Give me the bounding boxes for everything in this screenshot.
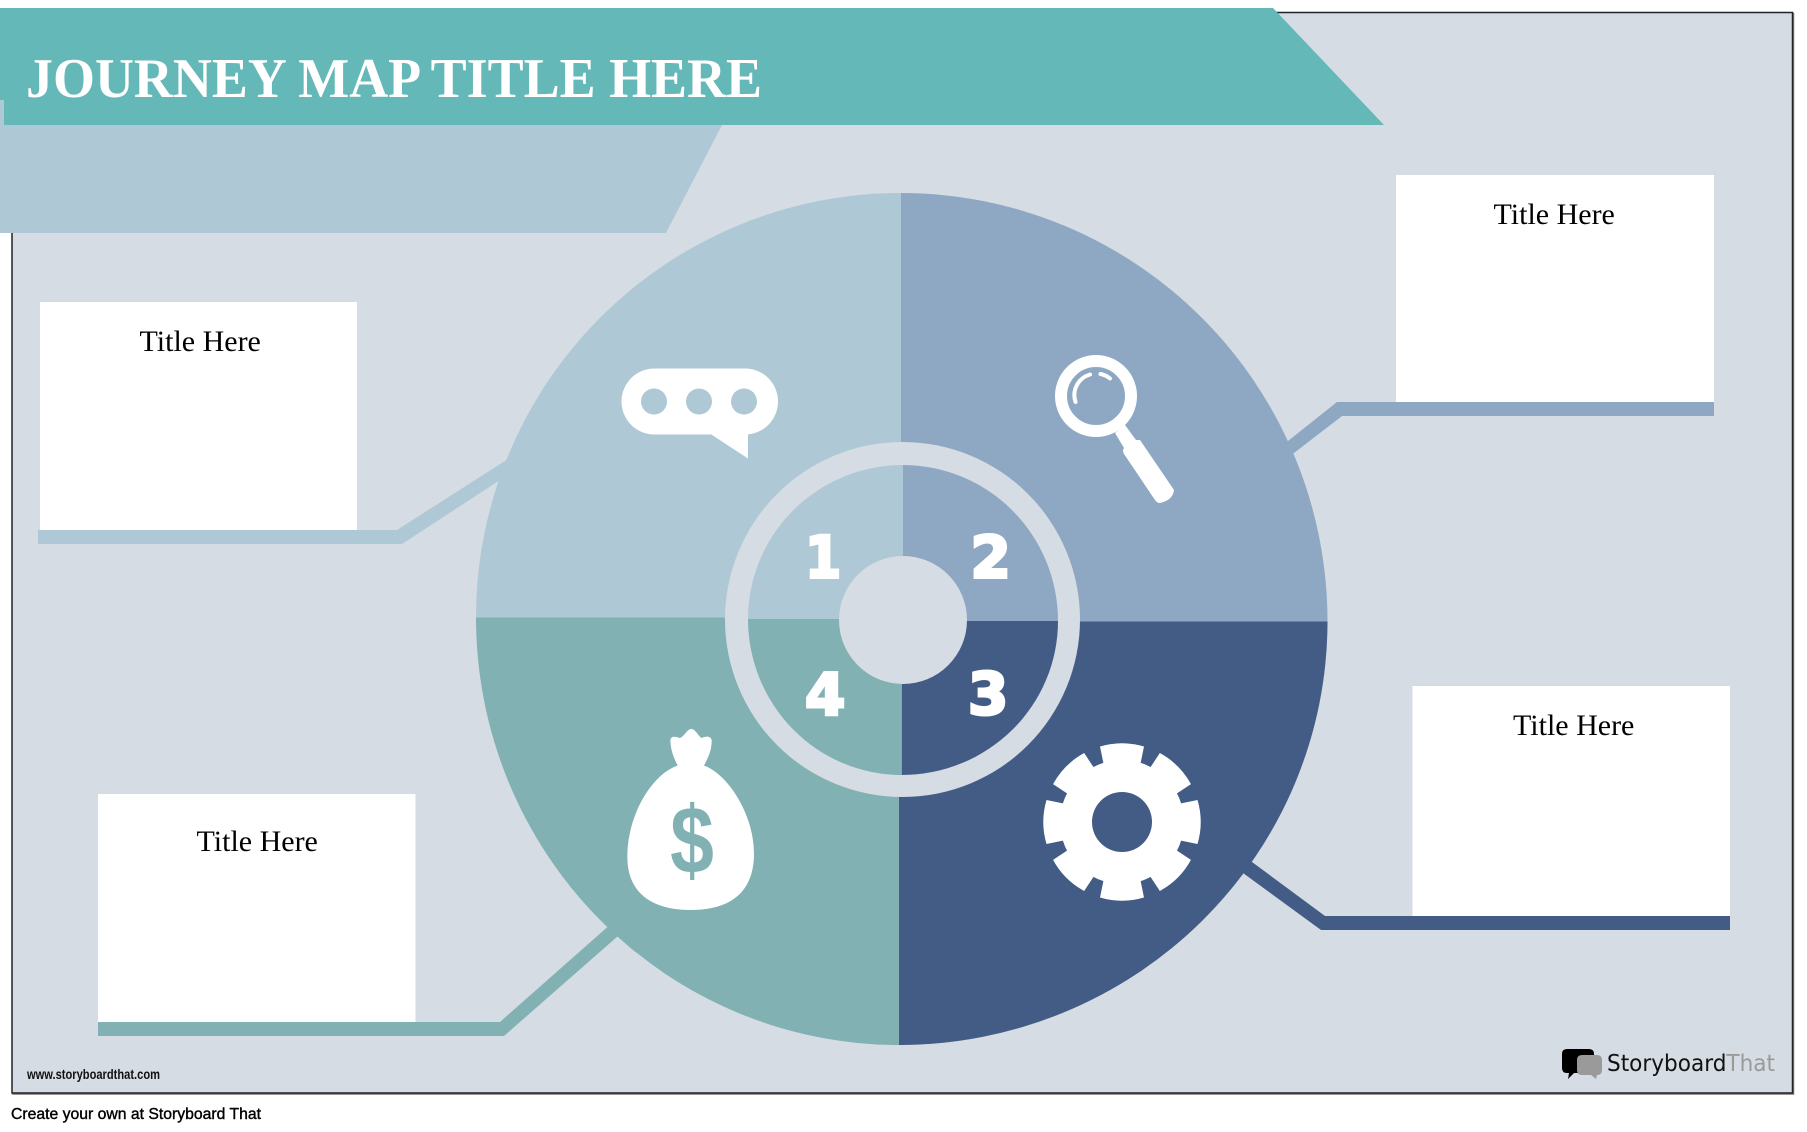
number 3: 3: [968, 660, 1008, 728]
heading: step 2: Title Here: [1494, 198, 1615, 231]
quadrant 1: [476, 193, 901, 618]
heading: step 3: Title Here: [1513, 709, 1634, 742]
heading: step 4: Title Here: [196, 825, 318, 858]
inner quadrant 2: [903, 465, 1058, 621]
icon: gear: [1043, 743, 1201, 901]
connector: step 2: [1280, 402, 1714, 460]
title banner: [0, 8, 1384, 125]
title: JOURNEY MAP TITLE HERE: [26, 48, 762, 110]
icon: money bag: $: [670, 787, 714, 894]
number 4: 4: [805, 660, 845, 728]
heading: step 1: Title Here: [140, 325, 261, 358]
footer credit: Create your own at Storyboard That: [11, 1106, 262, 1123]
logo text: StoryboardThat: [1607, 1051, 1775, 1077]
website label: www.storyboardthat.com: [26, 1067, 160, 1082]
chart: journey wheel: [476, 193, 1328, 1045]
inner quadrant 4: [748, 619, 902, 775]
logo icon: [1562, 1049, 1602, 1079]
quadrant 4: [476, 618, 899, 1045]
icon: speech bubble: [622, 368, 778, 458]
panel: step 3 text box: [1230, 686, 1730, 930]
number 1: 1: [805, 525, 841, 592]
panel: step 1 text box: [38, 302, 520, 544]
connector: step 4: [98, 925, 625, 1036]
ring: [725, 442, 1080, 797]
inner quadrant 1: [748, 465, 903, 619]
subtitle banner: [0, 100, 735, 233]
icon: magnifying glass: [1061, 361, 1174, 503]
panel: step 2 text box: [1280, 175, 1714, 460]
panel: step 4 text box: [98, 794, 625, 1036]
number 2: 2: [970, 524, 1011, 592]
connector: step 3: [1230, 860, 1730, 930]
connector: step 1: [38, 459, 520, 544]
logo: Storyboard That: [1562, 1049, 1775, 1079]
quadrant 3: [899, 622, 1328, 1045]
icon: money bag: [627, 729, 754, 910]
inner quadrant 3: [902, 621, 1058, 775]
quadrant 2: [901, 193, 1328, 622]
center circle: [839, 556, 967, 684]
